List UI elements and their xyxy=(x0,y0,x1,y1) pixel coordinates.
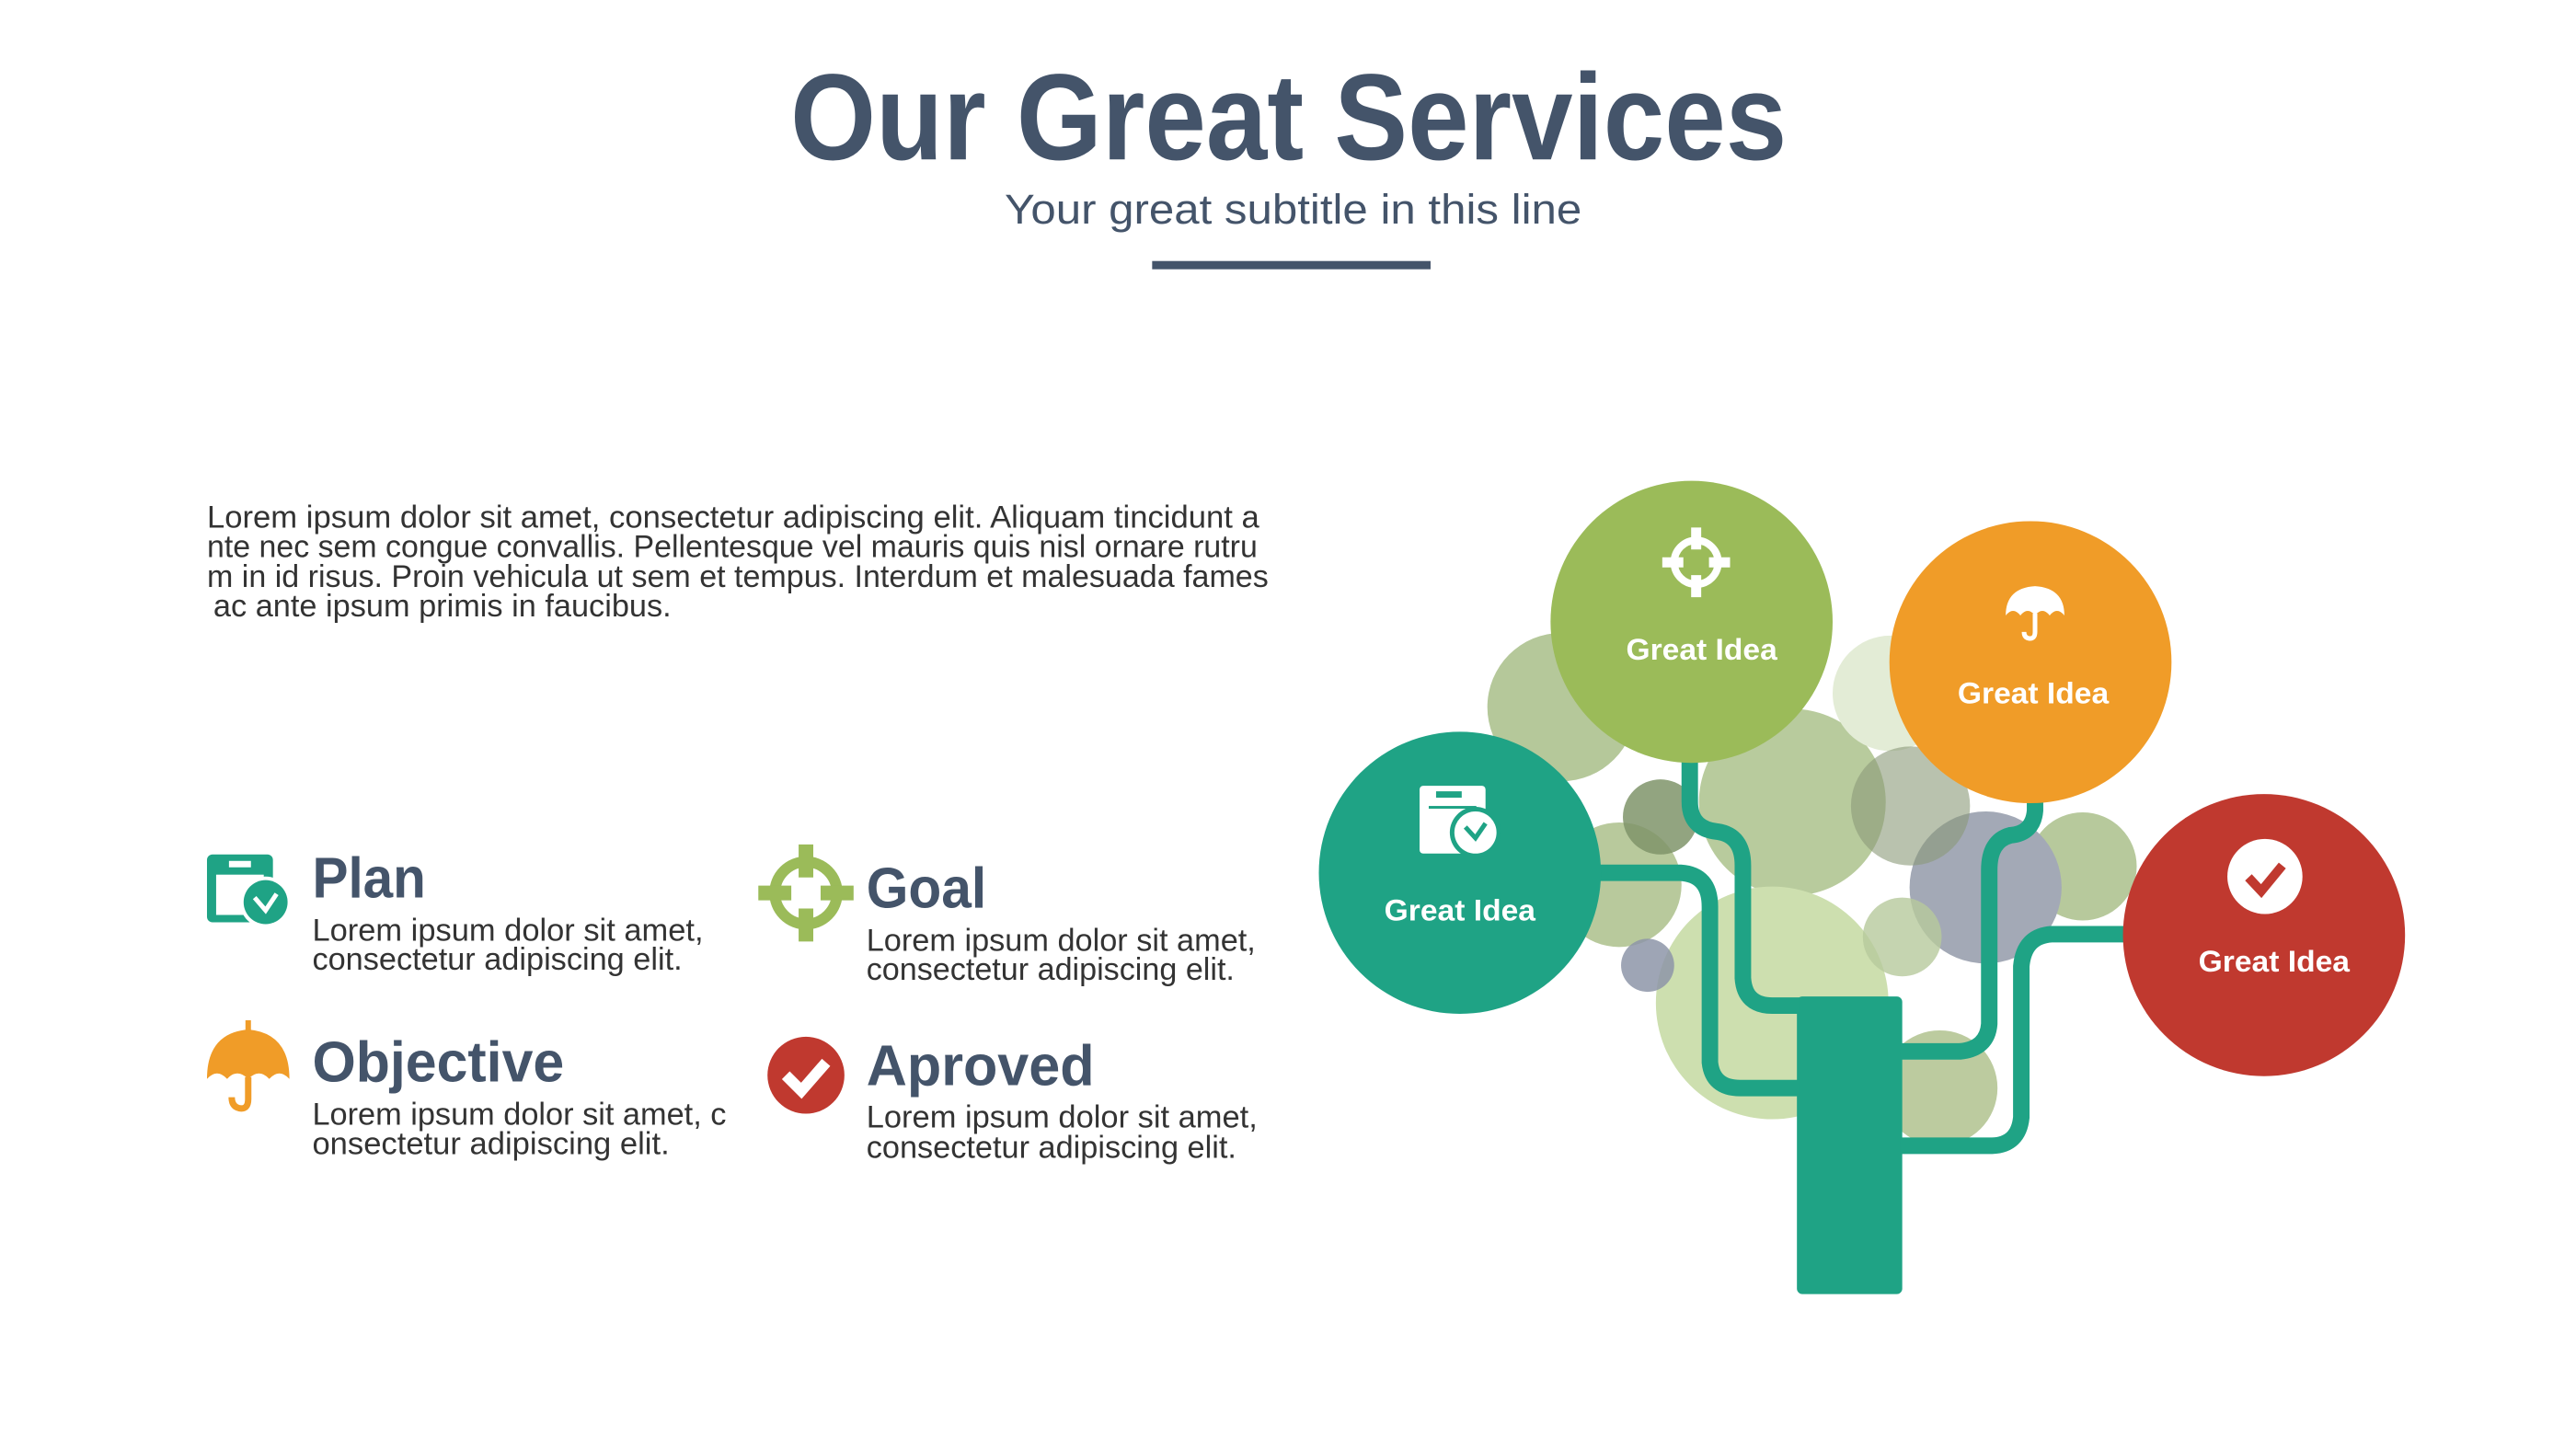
item: goal: Goal xyxy=(867,857,986,921)
item: plan: consectetur adipiscing elit. xyxy=(312,942,683,977)
item: objective: Objective xyxy=(312,1031,564,1095)
icon: check xyxy=(767,1037,845,1114)
icon: calendar clock xyxy=(207,855,292,927)
icon: umbrella xyxy=(2006,586,2064,638)
background bubbles xyxy=(1488,633,2137,1145)
circle: red great idea xyxy=(2123,794,2405,1076)
trunk xyxy=(1797,996,1903,1294)
item: plan: Lorem ipsum dolor sit amet, xyxy=(312,913,704,948)
branches xyxy=(1593,760,2125,1145)
item: objective: Lorem ipsum dolor sit amet, c xyxy=(312,1097,727,1132)
item: objective xyxy=(207,1020,727,1161)
circle: orange great idea: Great Idea xyxy=(1958,676,2110,710)
icon: calendar clock xyxy=(1420,786,1501,858)
item: aproved: consectetur adipiscing elit. xyxy=(867,1130,1236,1165)
intro paragraph: ac ante ipsum primis in faucibus. xyxy=(213,589,672,624)
item: goal xyxy=(758,845,1256,987)
intro paragraph: nte nec sem congue convallis. Pellentesque vel mauris quis nisl ornare rutru xyxy=(207,529,1258,564)
item: aproved xyxy=(767,1035,1258,1165)
icon: umbrella xyxy=(207,1020,290,1109)
circle: red great idea: Great Idea xyxy=(2199,944,2351,978)
circle: green great idea xyxy=(1550,481,1833,763)
intro paragraph: m in id risus. Proin vehicula ut sem et tempus. Interdum et malesuada fames xyxy=(207,559,1269,594)
item: goal: consectetur adipiscing elit. xyxy=(867,952,1235,987)
item: goal: Lorem ipsum dolor sit amet, xyxy=(867,923,1256,958)
item: aproved: Lorem ipsum dolor sit amet, xyxy=(867,1099,1258,1134)
item: aproved: Aproved xyxy=(867,1035,1095,1098)
item: plan xyxy=(207,847,704,977)
circle: orange great idea xyxy=(1890,521,2171,803)
intro paragraph: Lorem ipsum dolor sit amet, consectetur adipiscing elit. Aliquam tincidunt a xyxy=(207,500,1259,535)
item: plan: Plan xyxy=(312,847,426,911)
circle: teal great idea xyxy=(1319,731,1601,1014)
subtitle: Your great subtitle in this line xyxy=(1005,186,1581,233)
tree diagram xyxy=(1319,481,2405,1294)
circle: green great idea: Great Idea xyxy=(1627,632,1778,666)
icon: target xyxy=(758,845,854,941)
icon: check xyxy=(2227,839,2303,914)
title: Our Great Services xyxy=(790,49,1787,186)
intro paragraph xyxy=(207,500,1269,624)
circle: teal great idea: Great Idea xyxy=(1385,892,1536,926)
item: objective: onsectetur adipiscing elit. xyxy=(312,1126,670,1161)
icon: target xyxy=(1662,527,1730,597)
